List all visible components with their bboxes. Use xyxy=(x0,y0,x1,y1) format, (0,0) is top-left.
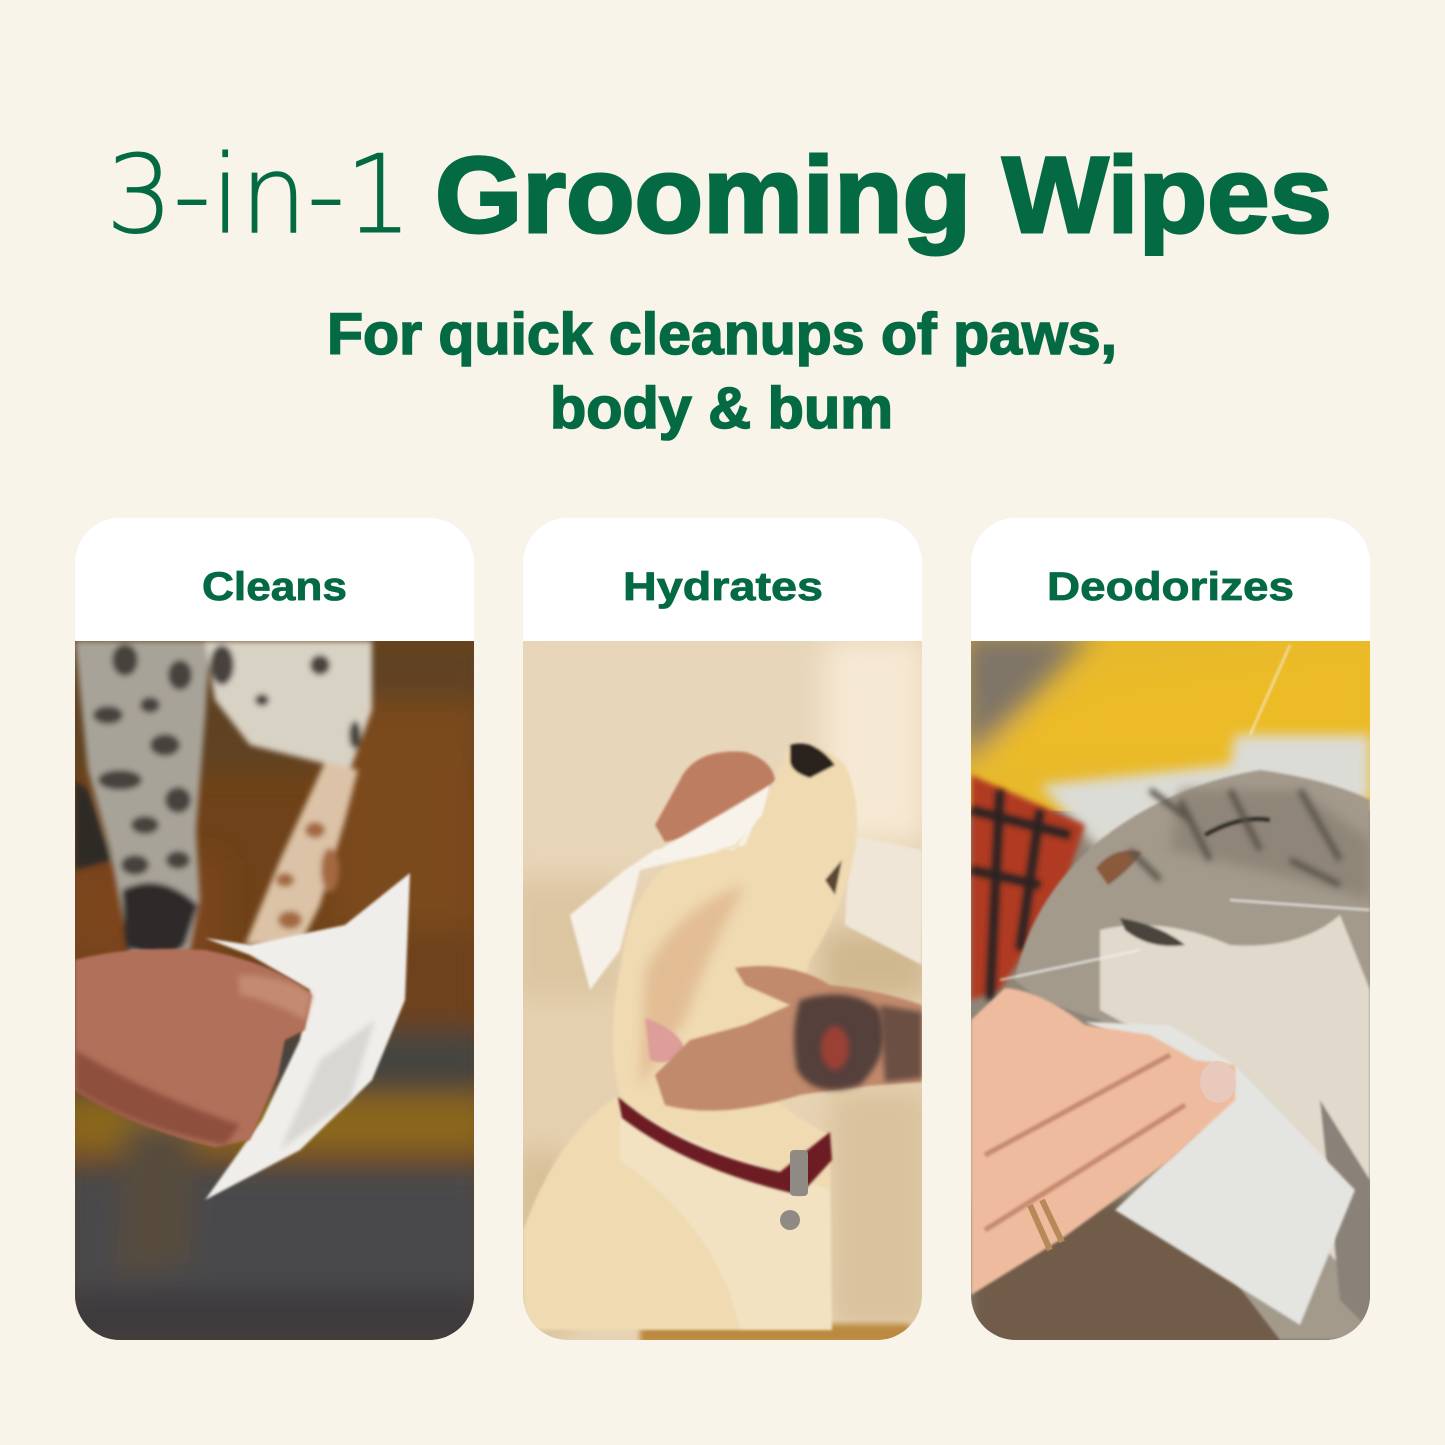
panel: cleans xyxy=(60,518,490,1355)
wipe xyxy=(1085,1022,1355,1325)
hand xyxy=(971,988,1235,1295)
card header: cleans xyxy=(75,518,474,642)
title: 3-in-1 xyxy=(106,133,412,258)
upper hand xyxy=(655,752,775,842)
sweater xyxy=(971,1200,1370,1350)
photo: wiping a dog's chin xyxy=(510,630,930,1344)
fingernail xyxy=(1200,1061,1236,1103)
cat leg and tail xyxy=(75,641,372,988)
plaid shirt xyxy=(971,775,1085,1000)
lower hand with tattoo xyxy=(655,966,922,1111)
label: deodorizes: Deodorizes xyxy=(1047,565,1294,609)
label: hydrates: Hydrates xyxy=(623,565,823,609)
dog xyxy=(523,744,857,1330)
hand xyxy=(75,949,312,1147)
wipes xyxy=(569,822,755,990)
label: cleans: Cleans xyxy=(202,565,347,609)
title xyxy=(106,133,1332,258)
ring xyxy=(1030,1200,1062,1250)
panel: hydrates xyxy=(510,518,930,1344)
subtitle: body & bum xyxy=(550,376,893,441)
collar xyxy=(618,1097,832,1195)
photo: wiping a cat's paw xyxy=(60,640,490,1355)
subtitle xyxy=(327,302,1117,441)
card header: hydrates xyxy=(523,518,922,642)
subtitle: For quick cleanups of paws, xyxy=(327,302,1117,367)
collar buckle and tag xyxy=(780,1150,808,1230)
photo: wiping a cat's chin xyxy=(960,630,1380,1350)
sleeve xyxy=(845,835,922,965)
panel: deodorizes xyxy=(960,518,1380,1350)
card header: deodorizes xyxy=(971,518,1370,642)
wipe xyxy=(205,873,410,1200)
cat xyxy=(1000,645,1370,1340)
title: Grooming Wipes xyxy=(435,134,1332,255)
